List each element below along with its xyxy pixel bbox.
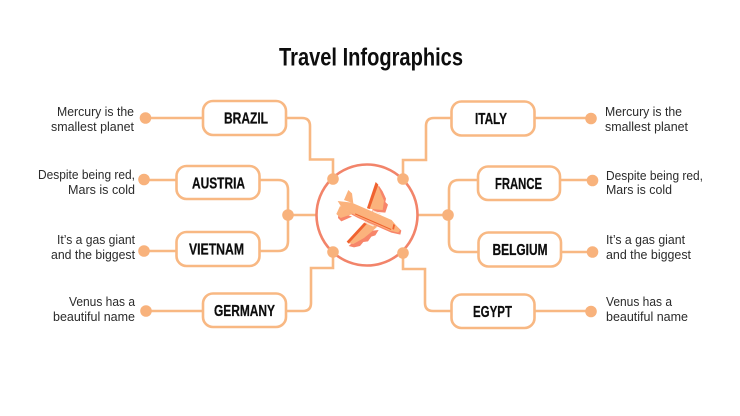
item: Egypt: EGYPT — [473, 304, 512, 321]
item: Vietnam: VIETNAM — [189, 242, 244, 258]
item: Italy: ITALY — [475, 111, 508, 128]
plane shadow — [338, 185, 401, 247]
item: France: Despite being red, — [606, 169, 703, 183]
item: Germany — [53, 294, 286, 327]
item: Italy — [452, 102, 689, 136]
item: Brazil: BRAZIL — [224, 110, 268, 128]
item: Egypt: beautiful name — [606, 310, 688, 324]
central circle — [316, 164, 418, 266]
plane near wing — [349, 222, 377, 244]
item: Brazil: smallest planet — [51, 120, 135, 134]
connector lines — [144, 118, 592, 311]
plane far wing — [367, 184, 384, 210]
item: Vietnam — [51, 232, 260, 266]
item: Belgium: and the biggest — [606, 248, 692, 262]
item: Austria: Mars is cold — [68, 183, 135, 197]
item: France: Mars is cold — [606, 183, 672, 197]
item: Egypt — [452, 294, 688, 328]
item: Brazil: Mercury is the — [57, 105, 134, 119]
item: Austria: AUSTRIA — [192, 176, 245, 192]
item: Vietnam: and the biggest — [51, 248, 136, 262]
item: Italy: smallest planet — [605, 120, 689, 134]
item: Belgium: BELGIUM — [492, 242, 548, 259]
item: Germany: Venus has a — [69, 295, 135, 309]
item: France: FRANCE — [495, 176, 542, 193]
plane fuselage — [338, 201, 400, 233]
item: Germany: GERMANY — [214, 303, 276, 320]
plane lower tail — [336, 206, 353, 218]
icon: airplane — [336, 182, 401, 247]
item: Italy: Mercury is the — [605, 105, 682, 119]
node dots — [282, 173, 454, 259]
title: Travel Infographics — [279, 44, 463, 72]
item: Belgium: It’s a gas giant — [606, 233, 686, 247]
item: Egypt: Venus has a — [606, 295, 672, 309]
item: Austria: Despite being red, — [38, 168, 135, 182]
item: Brazil — [51, 101, 286, 135]
item: Belgium — [478, 232, 692, 266]
item: Germany: beautiful name — [53, 310, 135, 324]
item: Vietnam: It’s a gas giant — [57, 233, 135, 247]
item: France — [478, 166, 703, 200]
plane upper tail — [344, 190, 353, 203]
item: Austria — [38, 166, 260, 199]
